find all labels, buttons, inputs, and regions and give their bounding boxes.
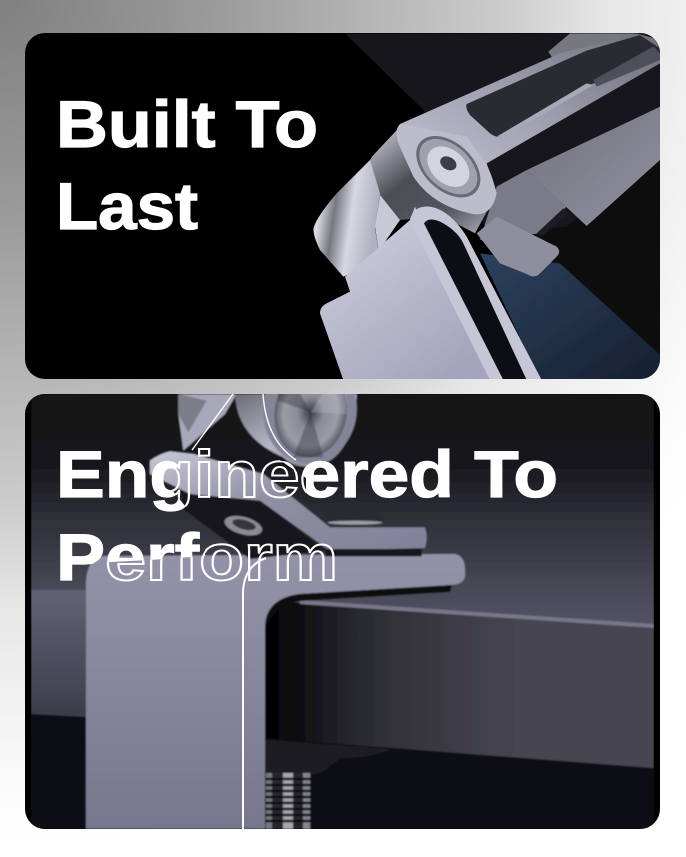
lower plate — [320, 207, 490, 380]
panel: engineered to perform — [25, 352, 660, 829]
knurled disc — [264, 394, 358, 462]
upper arm — [150, 352, 427, 559]
hinge cylinder — [370, 130, 487, 234]
threaded bolt — [264, 773, 311, 829]
u-shaped slot — [410, 206, 542, 380]
heading: engineered to perform: Perform — [56, 520, 338, 594]
heading: engineered to perform: Perform — [56, 520, 338, 594]
heading: engineered to perform: Engineered To — [56, 437, 558, 511]
clamp bracket — [86, 554, 465, 829]
heading: engineered to perform — [60, 448, 556, 582]
clamp pad — [264, 740, 391, 776]
photo: hinge bracket — [300, 33, 660, 380]
hinge bolt — [397, 124, 497, 214]
panel: built to last — [25, 33, 660, 380]
table front — [262, 600, 654, 768]
heading: built to last: Built To — [56, 87, 318, 161]
photo: desk clamp — [31, 352, 654, 829]
heading: built to last: Last — [56, 169, 198, 243]
heading: built to last — [60, 98, 316, 230]
heading: engineered to perform: Engineered To — [56, 437, 558, 511]
